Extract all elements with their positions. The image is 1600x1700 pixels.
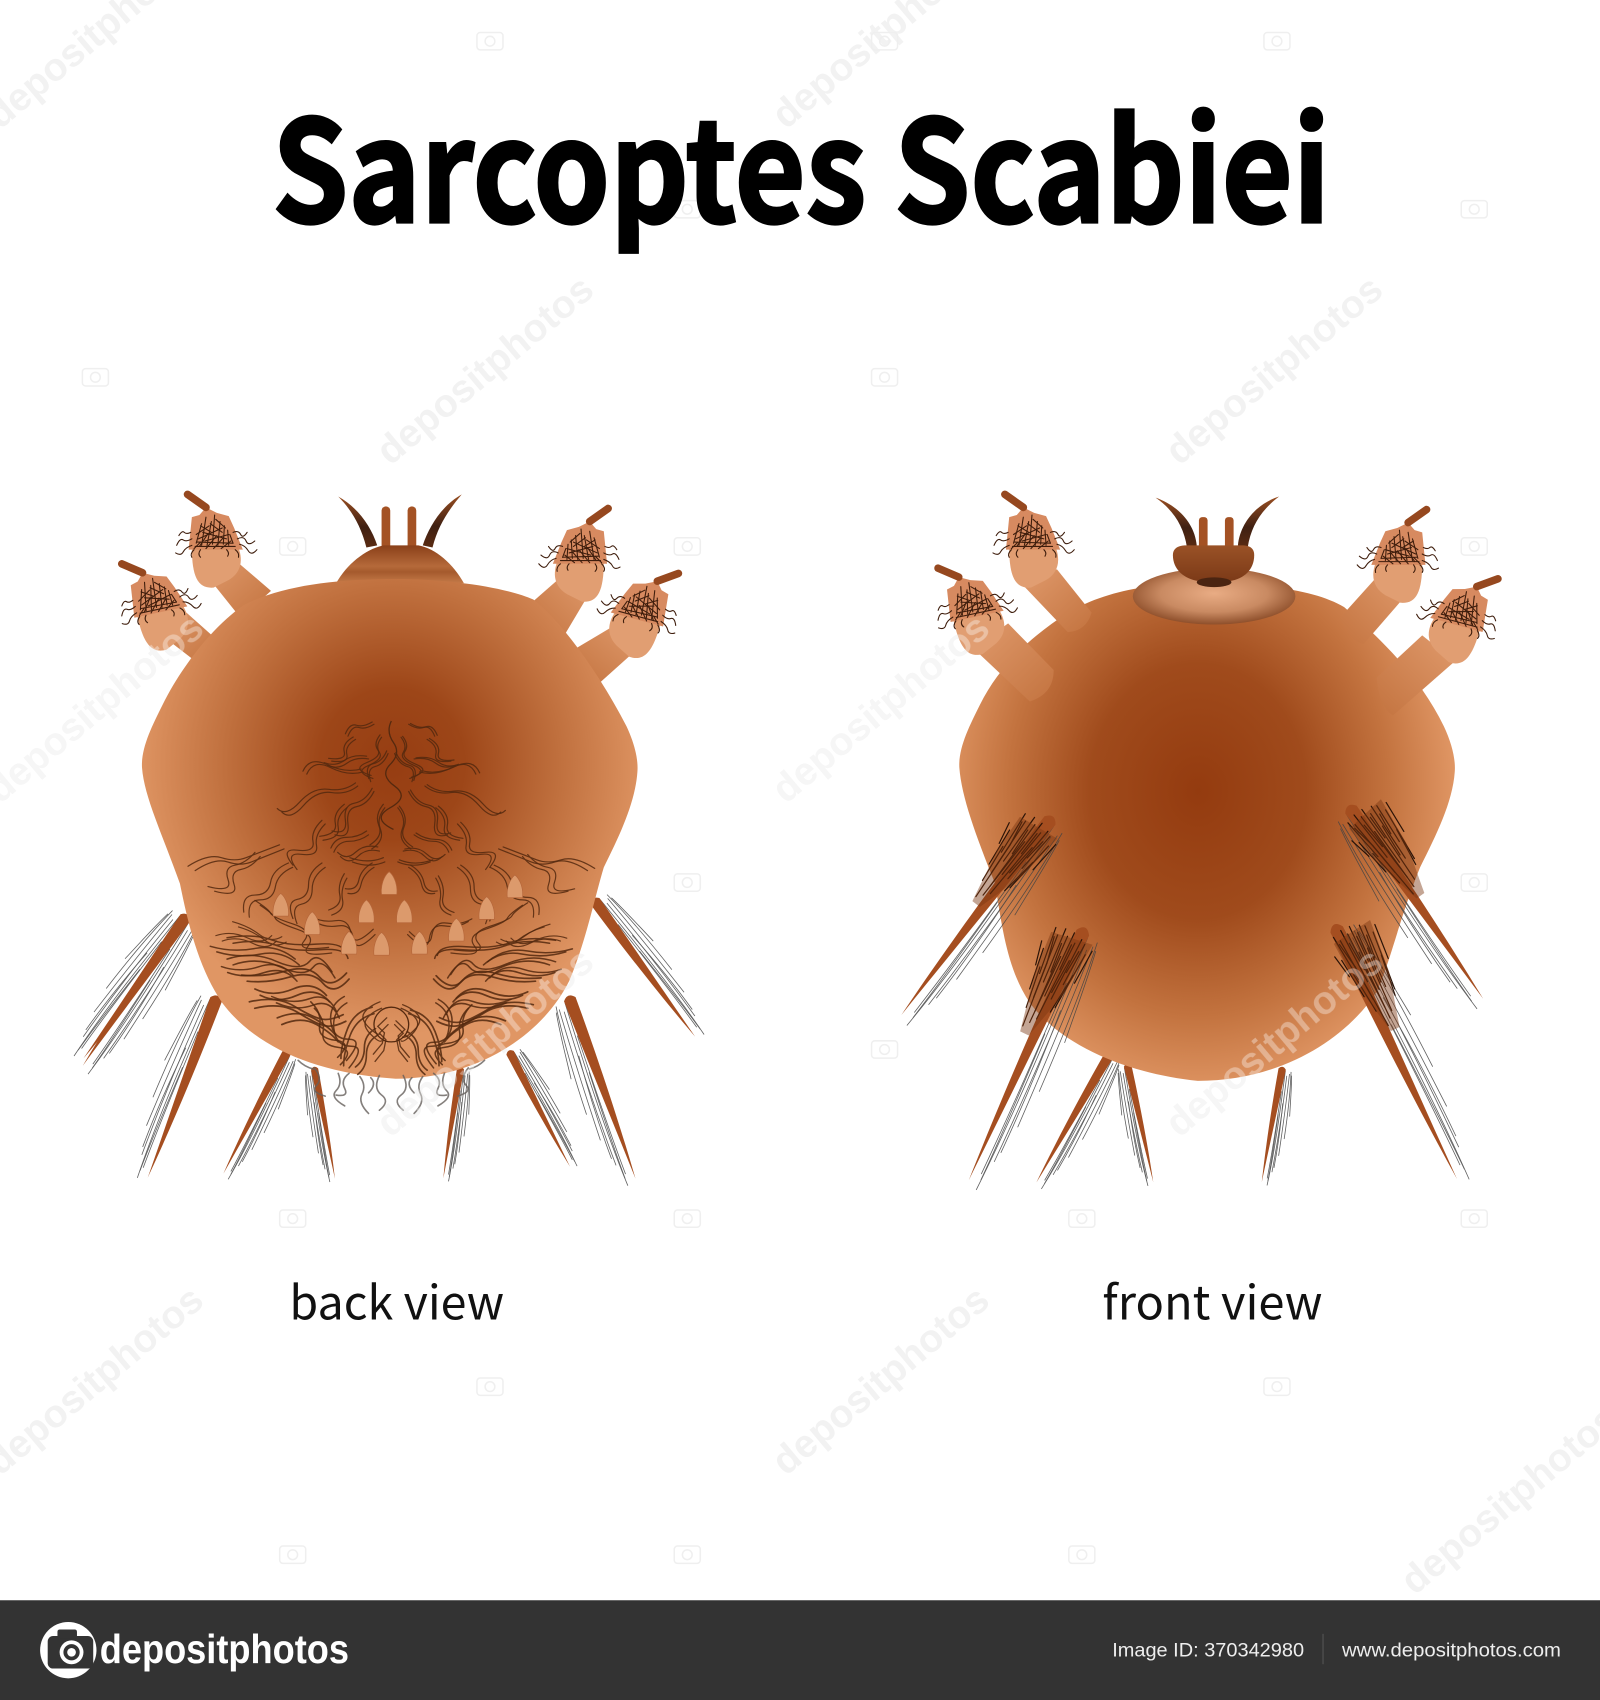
- head: front view: [1133, 497, 1295, 624]
- head: back view: [336, 494, 464, 583]
- watermark pattern: depositphotos: [368, 267, 602, 473]
- label: back view: back view: [289, 1266, 504, 1333]
- footer bar: [0, 1600, 1600, 1700]
- mite illustration: front view: [891, 494, 1509, 1197]
- title: Sarcoptes Scabiei: [272, 59, 1330, 263]
- dorsal hairs: [188, 721, 595, 1113]
- logo wordmark: depositphotos: [100, 1626, 349, 1672]
- watermark pattern: depositphotos: [1158, 940, 1391, 1145]
- watermark pattern: depositphotos: [764, 606, 998, 811]
- image id: Image ID: 370342980: [1112, 1640, 1304, 1662]
- body: back view: [142, 579, 638, 1079]
- rear bristles: front view: [1029, 1048, 1299, 1195]
- watermark pattern: depositphotos: [368, 940, 602, 1145]
- dorsal spines: [273, 872, 523, 955]
- legs: front view: [926, 494, 1509, 716]
- watermark over illustrations: depositphotos: [764, 606, 998, 811]
- watermark pattern: depositphotos: [764, 1278, 998, 1484]
- watermark over illustrations: [0, 606, 1391, 1145]
- body: front view: [959, 583, 1455, 1081]
- logo icon: camera: [40, 1622, 96, 1678]
- watermark pattern: depositphotos: [1158, 267, 1391, 473]
- legs: back view: [110, 494, 690, 683]
- label: front view: front view: [1102, 1266, 1322, 1333]
- watermark over illustrations: depositphotos: [1158, 940, 1391, 1145]
- mite illustration: back view: [62, 494, 715, 1191]
- website: www.depositphotos.com: [1341, 1640, 1561, 1662]
- watermark over illustrations: depositphotos: [368, 940, 602, 1145]
- bristles: back view: [62, 885, 715, 1191]
- side bristles: front view: [891, 796, 1493, 1197]
